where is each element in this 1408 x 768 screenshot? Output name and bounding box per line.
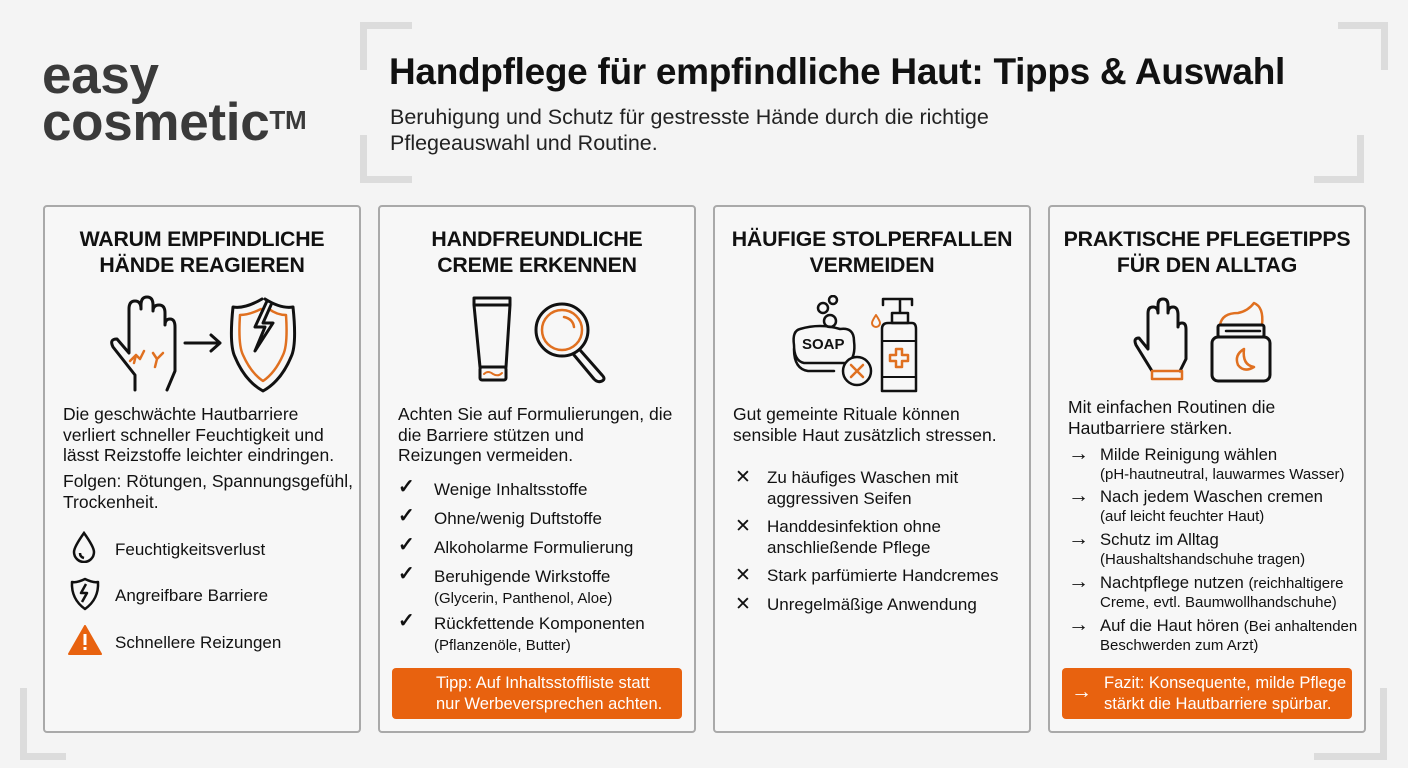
- checklist: [398, 476, 645, 654]
- list: mistakes: ✕: [735, 565, 751, 586]
- text: die Barriere stützen und: [398, 424, 584, 444]
- heading: HÄUFIGE STOLPERFALLEN: [732, 227, 1012, 251]
- text: [63, 404, 334, 465]
- list: icons: [68, 531, 281, 655]
- checklist: (Pflanzenöle, Butter): [434, 637, 571, 654]
- heading: [1064, 227, 1350, 277]
- list: mistakes: [735, 467, 998, 615]
- list: tips: (auf leicht feuchter Haut): [1100, 508, 1264, 525]
- heading: HÄNDE REAGIEREN: [99, 253, 305, 277]
- list: mistakes: aggressiven Seifen: [767, 489, 912, 508]
- text: Gut gemeinte Rituale können: [733, 404, 960, 424]
- checklist: ✓: [398, 610, 415, 632]
- callout: tipp: nur Werbeversprechen achten.: [436, 695, 662, 713]
- logo: [42, 46, 306, 152]
- list: tips: Creme, evtl. Baumwollhandschuhe): [1100, 594, 1337, 611]
- list: icons: Feuchtigkeitsverlust: [115, 540, 265, 559]
- list: icons: Angreifbare Barriere: [115, 586, 268, 605]
- logo: cosmeticTM: [42, 93, 306, 152]
- heading: [732, 227, 1012, 277]
- list: tips: Nachtpflege nutzen (reichhaltigere: [1100, 573, 1343, 592]
- list: tips: [1068, 442, 1357, 654]
- list: mistakes: ✕: [735, 467, 751, 488]
- icon: shield: [70, 578, 100, 610]
- checklist: Alkoholarme Formulierung: [434, 538, 633, 557]
- list: mistakes: anschließende Pflege: [767, 538, 931, 557]
- heading: FÜR DEN ALLTAG: [1117, 253, 1297, 277]
- text: Reizungen vermeiden.: [398, 445, 573, 465]
- list: mistakes: Unregelmäßige Anwendung: [767, 595, 977, 614]
- text: [1068, 397, 1275, 438]
- checklist: Rückfettende Komponenten: [434, 614, 645, 633]
- callout: fazit: →: [1071, 680, 1092, 703]
- checklist: ✓: [398, 563, 415, 585]
- checklist: Wenige Inhaltsstoffe: [434, 480, 587, 499]
- subtitle: [390, 105, 989, 155]
- icon: soap and dispenser: [792, 295, 918, 392]
- text: Achten Sie auf Formulierungen, die: [398, 404, 672, 424]
- list: tips: →: [1068, 613, 1089, 636]
- callout: fazit: [1062, 668, 1352, 719]
- callout: tipp: [392, 668, 682, 719]
- checklist: ✓: [398, 476, 415, 498]
- text: Die geschwächte Hautbarriere: [63, 404, 298, 424]
- checklist: ✓: [398, 534, 415, 556]
- list: tips: (Haushaltshandschuhe tragen): [1100, 551, 1305, 568]
- text: lässt Reizstoffe leichter eindringen.: [63, 445, 334, 465]
- text: Mit einfachen Routinen die: [1068, 397, 1275, 417]
- panel: creme: [378, 205, 696, 733]
- list: tips: Milde Reinigung wählen: [1100, 445, 1277, 464]
- checklist: Beruhigende Wirkstoffe: [434, 567, 610, 586]
- list: tips: Auf die Haut hören (Bei anhaltenden: [1100, 616, 1357, 635]
- list: mistakes: Stark parfümierte Handcremes: [767, 566, 998, 585]
- text: sensible Haut zusätzlich stressen.: [733, 424, 997, 444]
- list: tips: →: [1068, 527, 1089, 550]
- heading: VERMEIDEN: [810, 253, 934, 277]
- text: verliert schneller Feuchtigkeit und: [63, 424, 324, 444]
- checklist: ✓: [398, 505, 415, 527]
- icon: tube and magnifier: [472, 296, 606, 384]
- icon: hand to broken shield: [110, 296, 296, 392]
- list: tips: Schutz im Alltag: [1100, 530, 1219, 549]
- list: tips: Beschwerden zum Arzt): [1100, 637, 1258, 654]
- heading: [80, 227, 324, 277]
- heading: [431, 227, 643, 277]
- list: mistakes: ✕: [735, 594, 751, 615]
- text: [398, 404, 672, 465]
- list: tips: (pH-hautneutral, lauwarmes Wasser): [1100, 466, 1345, 483]
- callout: fazit: stärkt die Hautbarriere spürbar.: [1104, 695, 1331, 713]
- list: tips: →: [1068, 442, 1089, 465]
- text: folgen: Trockenheit.: [63, 492, 159, 512]
- icon: soap and dispenser: SOAP: [802, 336, 845, 353]
- list: tips: →: [1068, 570, 1089, 593]
- checklist: (Glycerin, Panthenol, Aloe): [434, 590, 612, 607]
- icon: warning: [68, 625, 102, 655]
- logo: easy: [42, 46, 159, 105]
- heading: HANDFREUNDLICHE: [431, 227, 643, 251]
- list: mistakes: Handdesinfektion ohne: [767, 517, 941, 536]
- callout: fazit: Fazit: Konsequente, milde Pflege: [1104, 674, 1346, 692]
- list: tips: Nach jedem Waschen cremen: [1100, 487, 1323, 506]
- panel: stolperfallen: [713, 205, 1031, 733]
- list: mistakes: ✕: [735, 516, 751, 537]
- heading: PRAKTISCHE PFLEGETIPPS: [1064, 227, 1350, 251]
- subtitle: Pflegeauswahl und Routine.: [390, 131, 658, 155]
- heading: WARUM EMPFINDLICHE: [80, 227, 324, 251]
- text: Hautbarriere stärken.: [1068, 418, 1232, 438]
- heading: CREME ERKENNEN: [437, 253, 637, 277]
- list: tips: →: [1068, 484, 1089, 507]
- list: mistakes: Zu häufiges Waschen mit: [767, 468, 958, 487]
- text: folgen: Folgen: Rötungen, Spannungsgefühl,: [63, 471, 353, 491]
- icon: glove and cream jar: [1134, 298, 1272, 382]
- panel: pflegetipps: [1048, 205, 1366, 733]
- text: folgen: [63, 471, 353, 512]
- title: Handpflege für empfindliche Haut: Tipps & Auswahl: [389, 51, 1285, 92]
- callout: tipp: Tipp: Auf Inhaltsstoffliste statt: [436, 674, 650, 692]
- icon: drop: [72, 531, 96, 563]
- checklist: Ohne/wenig Duftstoffe: [434, 509, 602, 528]
- text: [733, 404, 997, 444]
- subtitle: Beruhigung und Schutz für gestresste Hände durch die richtige: [390, 105, 989, 129]
- panel: warum: [43, 205, 361, 733]
- list: icons: Schnellere Reizungen: [115, 633, 281, 652]
